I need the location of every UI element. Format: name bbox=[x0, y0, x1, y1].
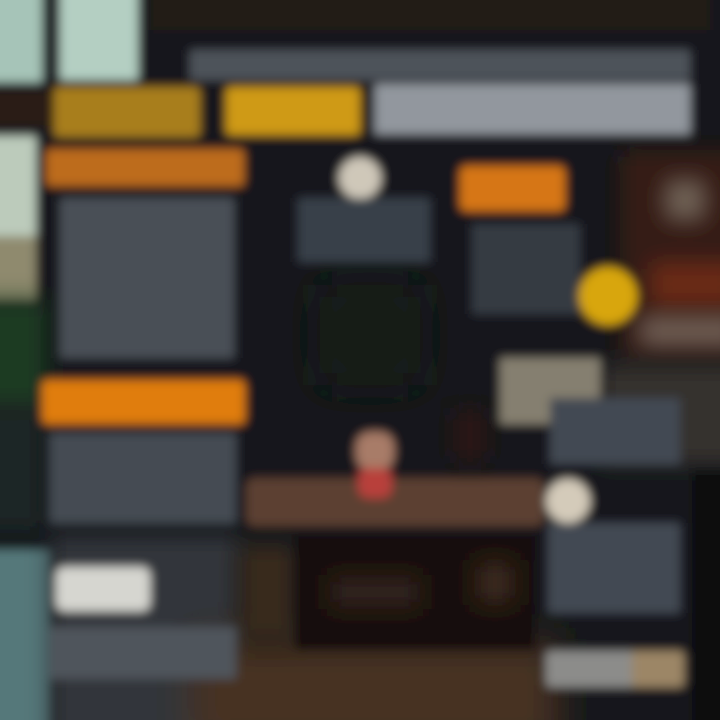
table base bbox=[295, 535, 535, 650]
table with candle bbox=[246, 408, 544, 650]
panel: left column three bbox=[50, 567, 236, 679]
vase bbox=[452, 408, 488, 463]
panel: centre top bbox=[298, 157, 430, 262]
icon: white dot bbox=[546, 479, 590, 523]
icon: yellow circle bbox=[579, 267, 637, 325]
icon: white dot bbox=[339, 157, 381, 199]
panel: right column upper bbox=[500, 358, 680, 464]
panel: centre right bbox=[460, 166, 580, 314]
footer label bbox=[546, 651, 684, 687]
panel: left column two bbox=[42, 380, 245, 523]
panel: left column one bbox=[46, 149, 244, 358]
table top bbox=[246, 478, 544, 526]
text block bbox=[50, 433, 236, 523]
heading highlight right bbox=[226, 87, 360, 135]
text block bbox=[60, 198, 234, 358]
heading label bbox=[56, 567, 150, 611]
text block bbox=[50, 627, 236, 679]
text block bbox=[548, 523, 680, 613]
heading bar bbox=[46, 149, 244, 186]
panel: right column lower bbox=[546, 479, 680, 613]
image strip bbox=[500, 358, 600, 424]
heading bar bbox=[42, 380, 245, 424]
candle bbox=[356, 432, 394, 470]
text block bbox=[472, 224, 580, 314]
text block bbox=[298, 198, 430, 262]
title block bbox=[190, 50, 690, 134]
text block bbox=[550, 398, 680, 464]
heading highlight left bbox=[54, 87, 200, 137]
heading bar bbox=[460, 166, 565, 211]
